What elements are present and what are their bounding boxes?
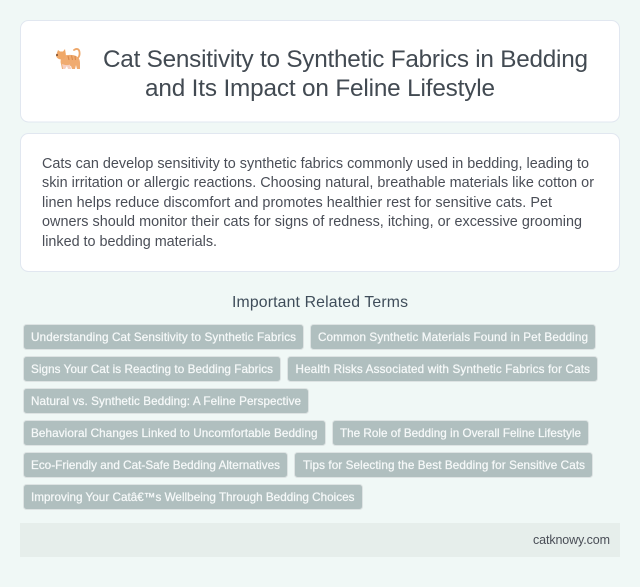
title xyxy=(103,46,588,102)
text block: description: owners should monitor their cats for signs of redness, itching, or excessive grooming xyxy=(42,214,582,230)
tag xyxy=(24,388,308,414)
tag xyxy=(294,452,592,478)
tag: Health Risks Associated with Synthetic Fabrics for Cats xyxy=(296,363,590,376)
tag xyxy=(310,324,596,350)
icon: cat xyxy=(56,49,80,69)
text block: description: skin irritation or allergic reactions. Choosing natural, breathable materials like cotton or xyxy=(42,175,594,191)
text block: description: linen helps reduce discomfort and promotes healthier rest for sensitive cats. Pet xyxy=(42,195,552,211)
tag: The Role of Bedding in Overall Feline Lifestyle xyxy=(340,427,581,440)
text block: description: linked to bedding materials. xyxy=(42,234,217,250)
tag: Improving Your Catâ€™s Wellbeing Through Bedding Choices xyxy=(31,491,355,504)
panel: title card xyxy=(20,20,620,122)
tag: Natural vs. Synthetic Bedding: A Feline Perspective xyxy=(31,395,301,408)
title: Cat Sensitivity to Synthetic Fabrics in Bedding xyxy=(103,46,588,73)
footer xyxy=(20,523,620,557)
tag xyxy=(24,420,326,446)
tag: Common Synthetic Materials Found in Pet Bedding xyxy=(318,331,588,344)
tag xyxy=(332,420,588,446)
tag xyxy=(24,324,304,350)
tag xyxy=(24,356,280,382)
tag xyxy=(24,452,288,478)
heading: related terms: Important Related Terms xyxy=(232,294,408,311)
tag xyxy=(288,356,598,382)
text block: description xyxy=(42,156,594,250)
tag xyxy=(24,484,362,510)
panel: term tags xyxy=(24,324,598,510)
tag: Eco-Friendly and Cat-Safe Bedding Alternatives xyxy=(31,459,280,472)
text block: description: Cats can develop sensitivity to synthetic fabrics commonly used in bedding, leading to xyxy=(42,156,589,172)
title: and Its Impact on Feline Lifestyle xyxy=(145,75,495,102)
panel: description card xyxy=(20,134,620,272)
footer text: catknowy.com xyxy=(533,533,610,547)
tag: Tips for Selecting the Best Bedding for Sensitive Cats xyxy=(303,459,585,472)
tag: Behavioral Changes Linked to Uncomfortable Bedding xyxy=(31,427,318,440)
tag: Understanding Cat Sensitivity to Synthetic Fabrics xyxy=(31,331,296,344)
tag: Signs Your Cat is Reacting to Bedding Fabrics xyxy=(31,363,273,376)
